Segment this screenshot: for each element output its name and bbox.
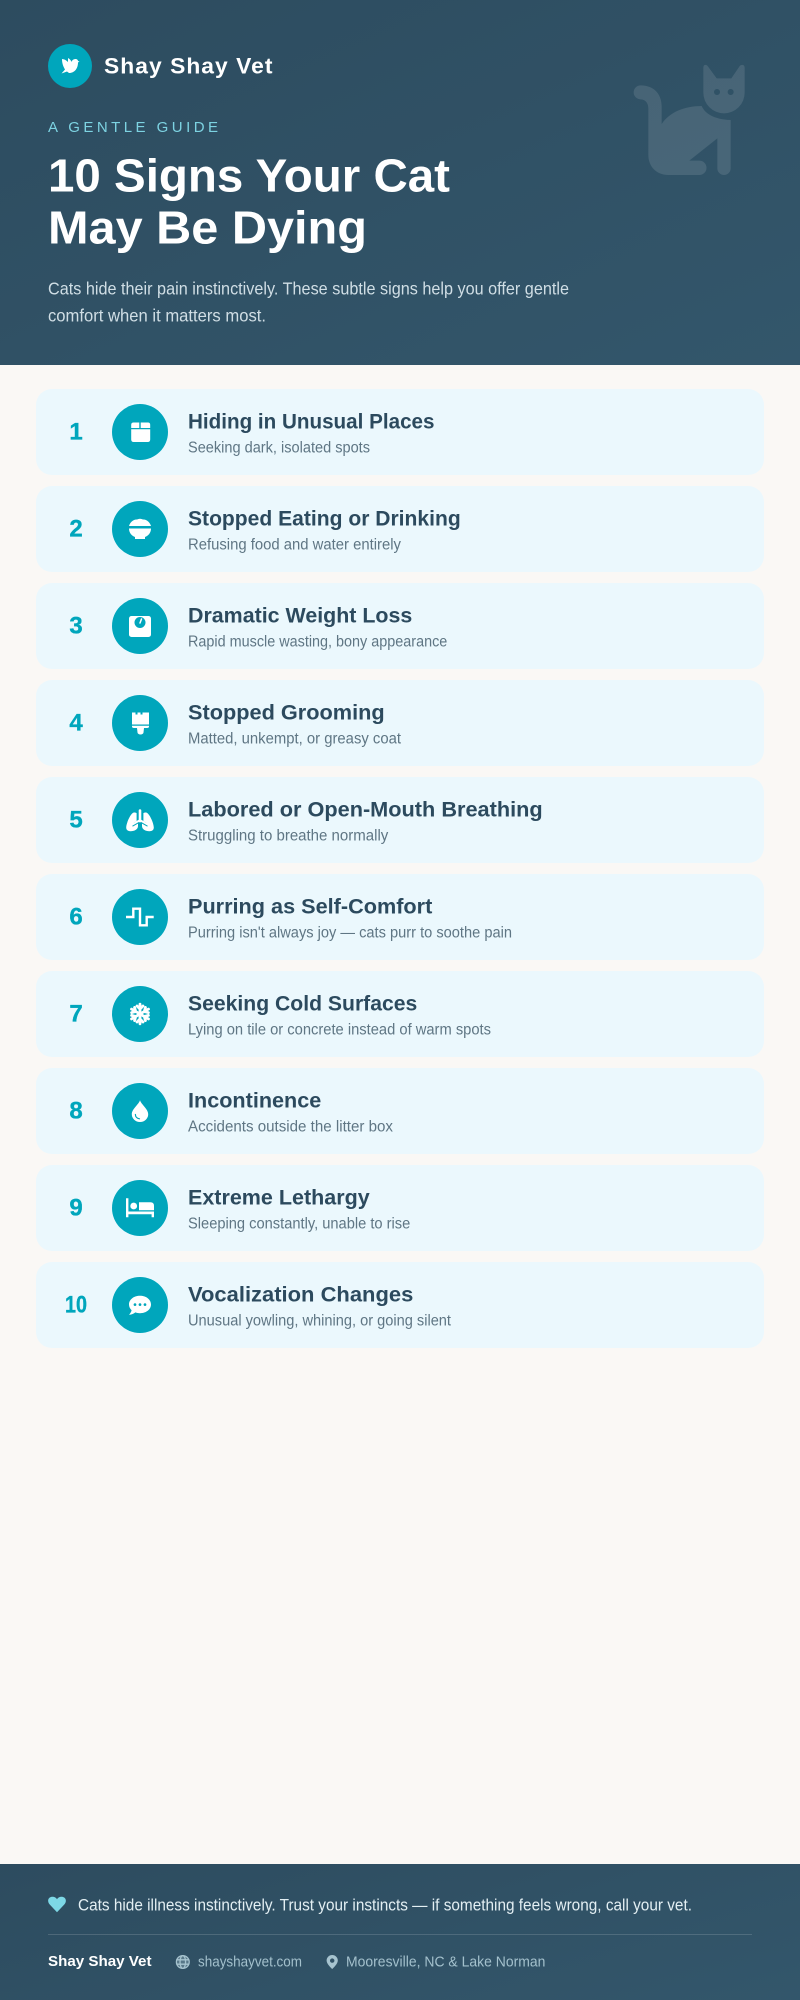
sign 9 panel: Sleeping constantly, unable to rise bbox=[188, 1216, 410, 1232]
sign 1 panel bbox=[36, 389, 764, 475]
sign 7 panel: Lying on tile or concrete instead of warm spots bbox=[188, 1022, 491, 1038]
brand name: Shay Shay Vet bbox=[104, 54, 274, 78]
sign 4 panel: 4 bbox=[69, 710, 83, 736]
callout text: Cats hide illness instinctively. Trust your instincts — if something feels wrong, call your vet. bbox=[78, 1896, 692, 1914]
sign 9 panel bbox=[36, 1165, 764, 1251]
sign 8 panel bbox=[36, 1068, 764, 1154]
sign 10 panel: Unusual yowling, whining, or going silent bbox=[188, 1312, 452, 1330]
sign 7 panel: 7 bbox=[69, 1000, 83, 1028]
sign 9 panel: 9 bbox=[69, 1194, 83, 1222]
intro text: Cats hide their pain instinctively. These subtle signs help you offer gentle bbox=[48, 278, 569, 298]
sign 6 panel: Purring isn't always joy — cats purr to soothe pain bbox=[188, 924, 512, 942]
sign 6 panel bbox=[36, 874, 764, 960]
website: shayshayvet.com bbox=[198, 1954, 302, 1970]
icon: square wave bbox=[112, 889, 168, 945]
sign 3 panel: Rapid muscle wasting, bony appearance bbox=[188, 634, 447, 650]
sign 8 panel: Incontinence bbox=[188, 1088, 321, 1112]
intro text: comfort when it matters most. bbox=[48, 306, 266, 326]
icon: snowflake bbox=[112, 986, 168, 1042]
intro text bbox=[48, 278, 569, 326]
sign 10 panel bbox=[36, 1262, 764, 1348]
sign 3 panel bbox=[36, 583, 764, 669]
sign 10 panel: 10 bbox=[65, 1292, 87, 1318]
sign 1 panel: Seeking dark, isolated spots bbox=[188, 440, 370, 456]
sign 4 panel: Stopped Grooming bbox=[188, 700, 385, 724]
icon: paint brush bbox=[112, 695, 168, 751]
icon: weight scale bbox=[112, 598, 168, 654]
sign 7 panel bbox=[36, 971, 764, 1057]
sign 5 panel: Struggling to breathe normally bbox=[188, 828, 389, 844]
icon: globe bbox=[176, 1956, 189, 1968]
footer panel bbox=[0, 1864, 800, 2000]
eyebrow: A GENTLE GUIDE bbox=[48, 119, 218, 136]
sign 2 panel: Stopped Eating or Drinking bbox=[188, 506, 461, 530]
icon: cat watermark bbox=[634, 65, 745, 175]
title bbox=[48, 150, 450, 254]
header panel bbox=[0, 0, 800, 365]
footer brand: Shay Shay Vet bbox=[48, 1953, 152, 1970]
sign 9 panel: Extreme Lethargy bbox=[188, 1186, 370, 1210]
sign 8 panel: 8 bbox=[69, 1098, 83, 1124]
sign 6 panel: 6 bbox=[69, 904, 83, 930]
sign 5 panel: 5 bbox=[69, 806, 83, 834]
sign 2 panel: 2 bbox=[69, 516, 83, 542]
location: Mooresville, NC & Lake Norman bbox=[346, 1954, 545, 1970]
sign 5 panel: Labored or Open-Mouth Breathing bbox=[188, 798, 543, 822]
sign 2 panel: Refusing food and water entirely bbox=[188, 536, 401, 554]
title: May Be Dying bbox=[48, 202, 367, 254]
sign 5 panel bbox=[36, 777, 764, 863]
logo badge bbox=[48, 44, 92, 88]
sign 1 panel: Hiding in Unusual Places bbox=[188, 410, 435, 434]
icon: box bbox=[112, 404, 168, 460]
icon: map pin bbox=[327, 1955, 338, 1969]
sign 10 panel: Vocalization Changes bbox=[188, 1282, 413, 1306]
icon: bed bbox=[112, 1180, 168, 1236]
sign 4 panel bbox=[36, 680, 764, 766]
sign 7 panel: Seeking Cold Surfaces bbox=[188, 992, 417, 1016]
sign 1 panel: 1 bbox=[69, 418, 83, 446]
icon: bowl bbox=[112, 501, 168, 557]
sign 2 panel bbox=[36, 486, 764, 572]
sign 3 panel: 3 bbox=[69, 612, 83, 640]
title: 10 Signs Your Cat bbox=[48, 150, 450, 202]
icon: droplet bbox=[112, 1083, 168, 1139]
icon: speech bubble bbox=[112, 1277, 168, 1333]
icon: lungs bbox=[112, 792, 168, 848]
sign 8 panel: Accidents outside the litter box bbox=[188, 1118, 393, 1136]
sign 4 panel: Matted, unkempt, or greasy coat bbox=[188, 730, 402, 748]
sign 6 panel: Purring as Self-Comfort bbox=[188, 894, 432, 918]
sign 3 panel: Dramatic Weight Loss bbox=[188, 604, 412, 628]
icon: heart bbox=[48, 1897, 66, 1912]
